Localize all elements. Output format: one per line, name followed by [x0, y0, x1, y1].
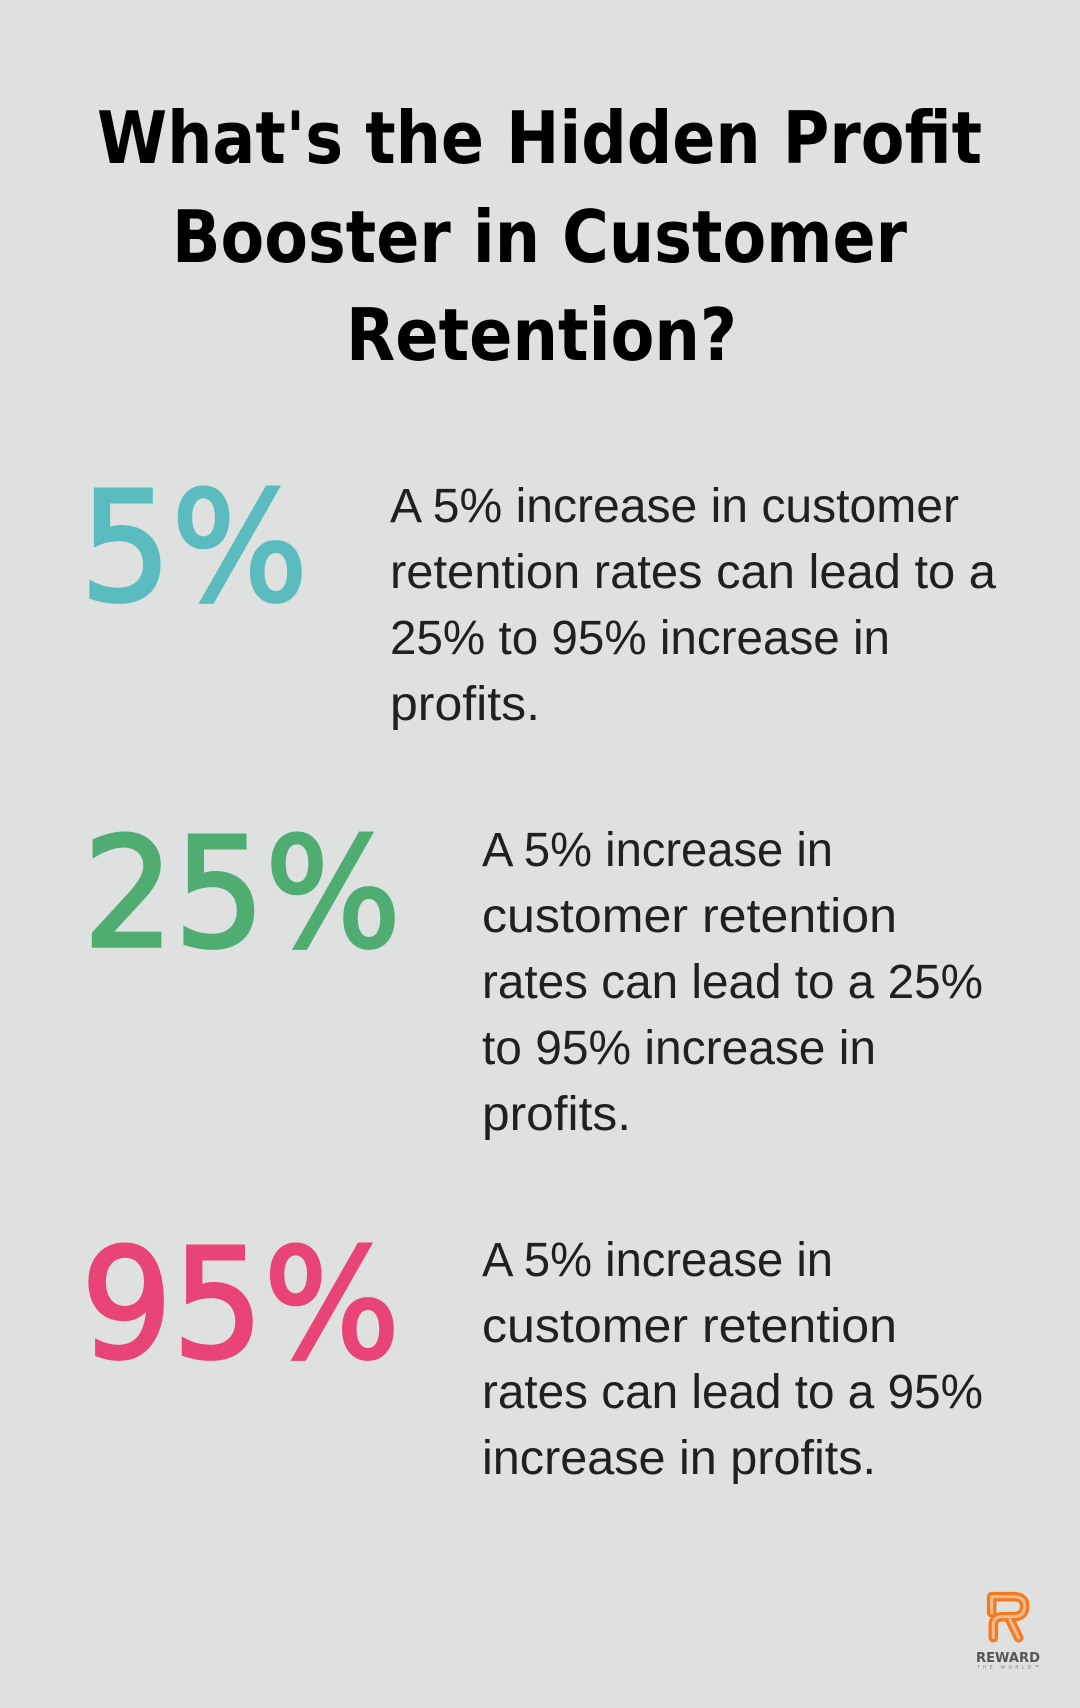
stat: 5%	[80, 459, 996, 731]
description: 5% stat	[390, 480, 996, 731]
logo: Reward the World	[976, 1597, 1040, 1670]
description: 5% stat: A 5% increase in customer	[390, 480, 959, 533]
description: 25% stat	[482, 824, 983, 1141]
number: 25%: 25%	[83, 805, 401, 982]
wordmark: REWARD: REWARD	[976, 1650, 1040, 1666]
number: 5%: 5%	[80, 459, 308, 636]
number: 95%: 95%	[81, 1216, 400, 1393]
description: 5% stat: retention rates can lead to a	[390, 546, 996, 599]
description: 25% stat: profits.	[482, 1088, 631, 1141]
title: Retention?	[346, 293, 737, 377]
tagline: THE WORLD: THE WORLD™	[977, 1664, 1039, 1670]
description: 95% stat: customer retention	[482, 1300, 897, 1353]
stat: 95%	[81, 1216, 983, 1485]
stat: 25%	[83, 805, 983, 1141]
title: Booster in Customer	[172, 195, 907, 279]
description: 95% stat: increase in profits.	[482, 1432, 876, 1485]
title	[97, 96, 982, 377]
description: 25% stat: to 95% increase in	[482, 1022, 876, 1075]
description: 25% stat: rates can lead to a 25%	[482, 956, 983, 1009]
description: 5% stat: 25% to 95% increase in	[390, 612, 890, 665]
icon: orange R	[992, 1597, 1025, 1638]
description: 5% stat: profits.	[390, 678, 540, 731]
title: What's the Hidden Profit	[97, 96, 982, 180]
description: 25% stat: A 5% increase in	[482, 824, 833, 877]
description: 95% stat: rates can lead to a 95%	[482, 1366, 983, 1419]
description: 95% stat: A 5% increase in	[482, 1234, 833, 1287]
description: 95% stat	[482, 1234, 983, 1485]
description: 25% stat: customer retention	[482, 890, 897, 943]
